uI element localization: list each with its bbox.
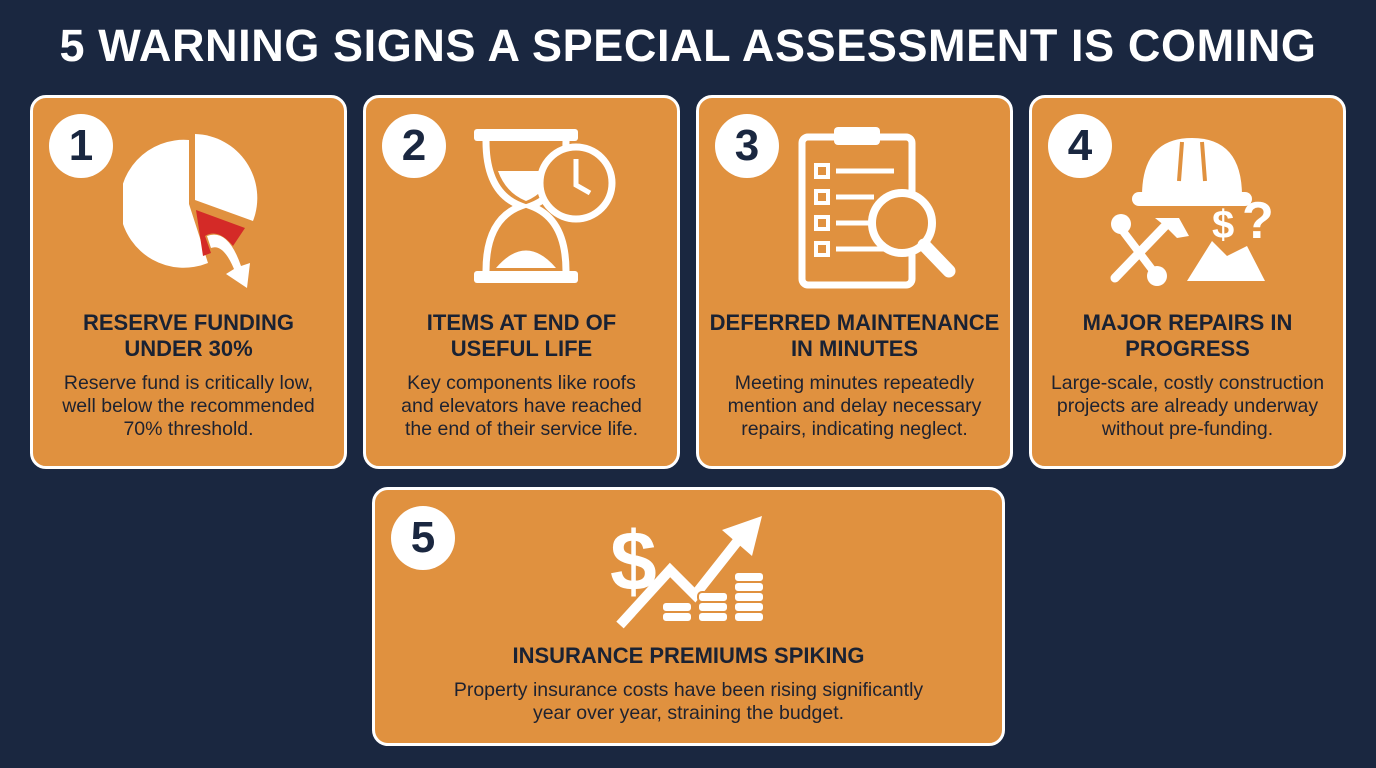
body [1051,372,1324,440]
body [454,679,923,724]
heading: USEFUL LIFE [451,336,592,361]
body: Large-scale, costly construction [1051,372,1324,394]
panel: insurance premiums [372,487,1005,746]
icon: dollar, rising arrow, coins: $ [610,514,657,608]
heading: IN MINUTES [791,336,918,361]
panel: major repairs [1029,95,1346,469]
icon: clipboard with magnifier [798,127,956,288]
panel: deferred maintenance [696,95,1013,469]
body: Key components like roofs [407,372,636,394]
number 2 [382,114,446,178]
icon: hard hat, tools, rubble [1110,138,1274,286]
panel: end of useful life [363,95,680,469]
body: well below the recommended [62,395,315,417]
icon: hard hat, tools, rubble: $ [1212,203,1234,247]
heading: RESERVE FUNDING [83,310,294,335]
panel: reserve funding [30,95,347,469]
number 2: 2 [402,121,426,170]
body [728,372,982,440]
heading [427,310,616,361]
number 3 [715,114,779,178]
number 5: 5 [411,513,435,562]
heading: DEFERRED MAINTENANCE [710,310,999,335]
heading: PROGRESS [1125,336,1250,361]
heading [83,310,294,361]
body: and elevators have reached [401,395,642,417]
body: without pre-funding. [1102,418,1273,440]
heading: UNDER 30% [124,336,253,361]
heading: MAJOR REPAIRS IN [1083,310,1292,335]
number 4 [1048,114,1112,178]
number 5 [391,506,455,570]
heading: INSURANCE PREMIUMS SPIKING [512,643,865,668]
icon: hourglass and clock [474,129,616,283]
number 1: 1 [69,121,93,170]
body [401,372,642,440]
body [62,372,315,440]
body: Meeting minutes repeatedly [735,372,974,394]
heading [710,310,999,361]
title: 5 WARNING SIGNS A SPECIAL ASSESSMENT IS COMING [60,20,1316,71]
body: Reserve fund is critically low, [64,372,313,394]
body: year over year, straining the budget. [533,702,844,724]
body: mention and delay necessary [728,395,981,417]
body: repairs, indicating neglect. [741,418,968,440]
number 4: 4 [1068,121,1092,170]
body: Property insurance costs have been rising significantly [454,679,923,701]
icon: pie chart [123,134,258,288]
heading [1083,310,1292,361]
icon: dollar, rising arrow, coins [610,514,763,628]
heading: ITEMS AT END OF [427,310,616,335]
body: 70% threshold. [123,418,254,440]
number 1 [49,114,113,178]
icon: hard hat, tools, rubble: ? [1242,192,1274,250]
body: projects are already underway [1057,395,1318,417]
body: the end of their service life. [405,418,638,440]
number 3: 3 [735,121,759,170]
